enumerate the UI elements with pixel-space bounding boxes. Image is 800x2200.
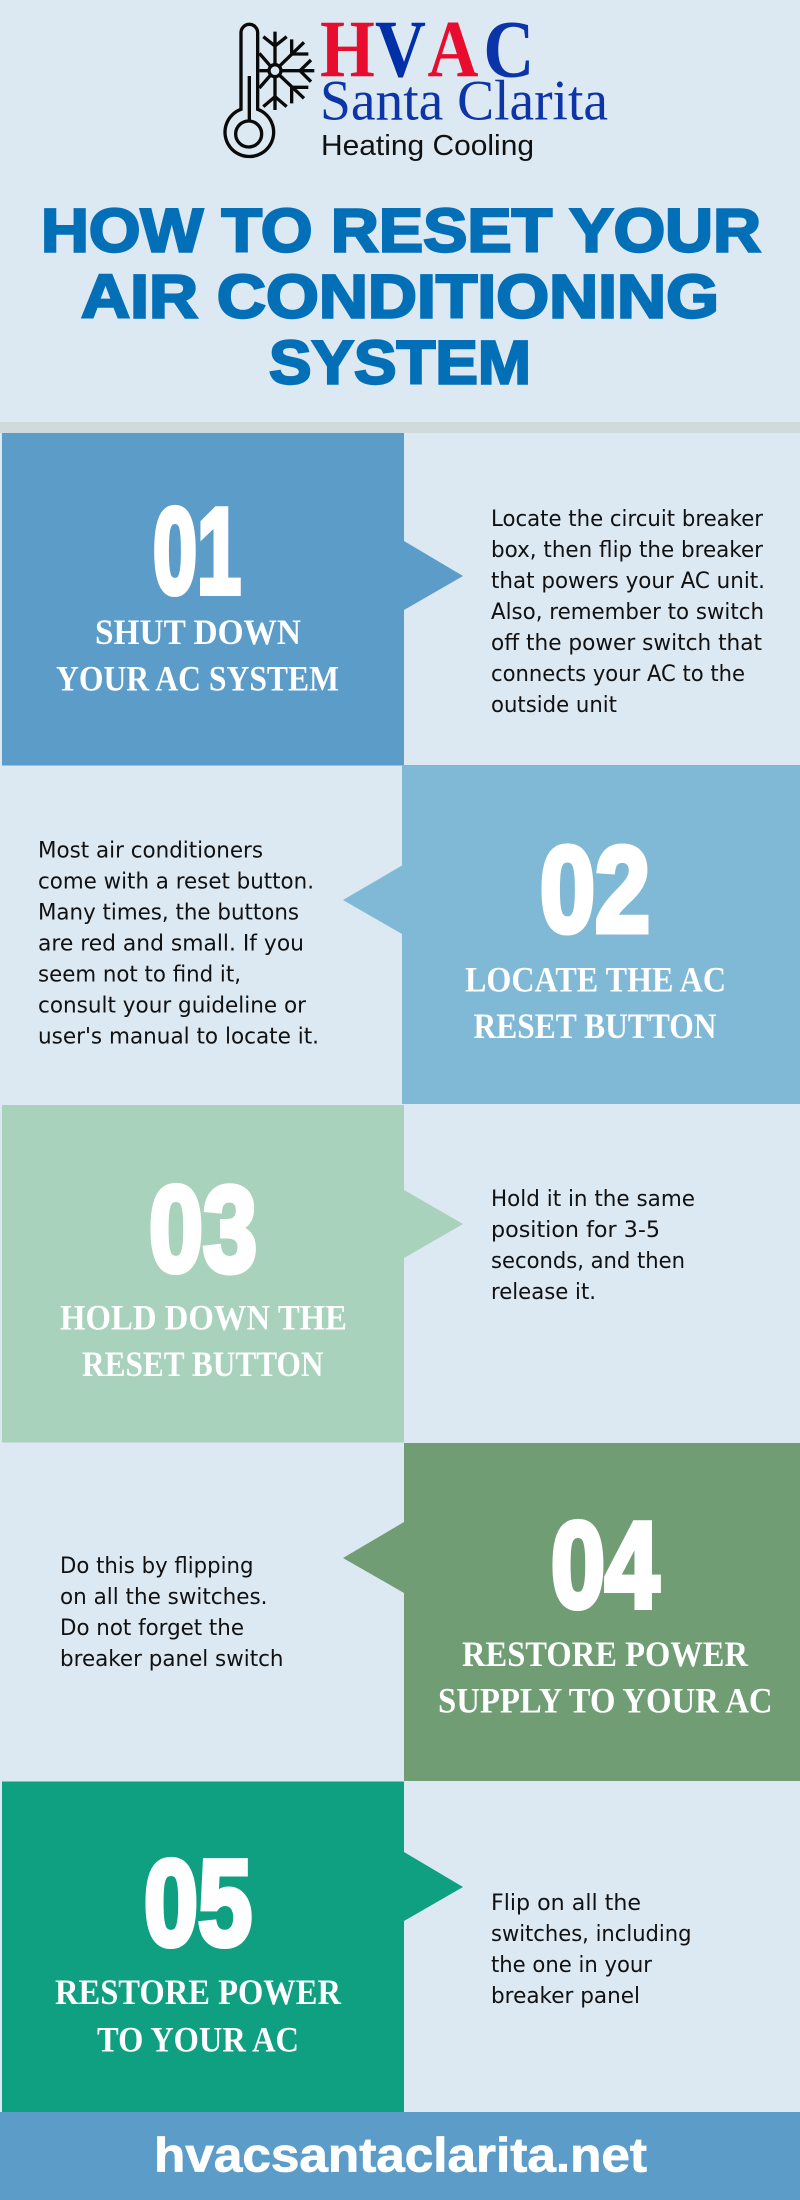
step description 01: Also, remember to switch <box>491 600 764 625</box>
footer website URL: hvacsantaclarita.net <box>154 2130 647 2182</box>
step heading 05 <box>55 1972 342 2060</box>
step heading 04 <box>438 1634 772 1720</box>
step heading 05: TO YOUR AC <box>97 2020 299 2060</box>
step description 02: consult your guideline or <box>38 994 307 1018</box>
step description 04: Do this by flipping <box>60 1554 254 1579</box>
step description 02: come with a reset button. <box>38 870 314 894</box>
step heading 02 <box>465 960 726 1046</box>
step description 03 <box>491 1187 695 1305</box>
step number 02: 02 <box>540 822 650 958</box>
step description 04 <box>60 1554 284 1672</box>
step description 04: on all the switches. <box>60 1585 268 1610</box>
step heading 03: HOLD DOWN THE <box>60 1298 347 1338</box>
step description 02: Many times, the buttons <box>38 900 299 926</box>
step heading 04: RESTORE POWER <box>462 1634 749 1674</box>
title: HOW TO RESET YOUR <box>41 196 761 264</box>
logo wordmark: HVAC: A <box>428 4 478 95</box>
logo wordmark: HVAC: H <box>320 4 375 95</box>
step description 01: outside unit <box>491 693 617 718</box>
step description 03: Hold it in the same <box>491 1187 695 1212</box>
step description 01: that powers your AC unit. <box>491 569 765 594</box>
step heading 01: YOUR AC SYSTEM <box>56 658 339 698</box>
step description 05 <box>491 1891 692 2009</box>
logo tagline: Heating Cooling <box>321 130 534 162</box>
step description 01 <box>491 507 765 718</box>
logo wordmark: HVAC: V <box>375 4 426 95</box>
step heading 01 <box>56 612 339 698</box>
step description 05: breaker panel <box>491 1984 640 2009</box>
step heading 02: RESET BUTTON <box>474 1006 716 1046</box>
icon: thermometer with snowflake <box>225 24 314 157</box>
step description 03: release it. <box>491 1280 596 1305</box>
panel: step 04 <box>60 1443 800 1781</box>
step heading 05: RESTORE POWER <box>55 1972 342 2012</box>
step description 02: are red and small. If you <box>38 932 304 956</box>
title <box>41 196 761 396</box>
step description 03: seconds, and then <box>491 1249 685 1274</box>
title: AIR CONDITIONING <box>81 262 719 330</box>
step description 04: Do not forget the <box>60 1616 244 1641</box>
panel: step 02 <box>38 765 800 1104</box>
step number 05: 05 <box>144 1835 252 1971</box>
step number 04: 04 <box>551 1497 659 1633</box>
step heading 02: LOCATE THE AC <box>465 960 726 1000</box>
logo wordmark: HVAC: C <box>483 4 534 95</box>
panel: step 03 <box>2 1105 695 1442</box>
step number 01: 01 <box>153 483 241 619</box>
step heading 03 <box>60 1298 347 1384</box>
logo <box>225 4 608 162</box>
step description 04: breaker panel switch <box>60 1647 284 1672</box>
step description 05: switches, including <box>491 1922 692 1947</box>
step description 01: off the power switch that <box>491 631 762 656</box>
step heading 03: RESET BUTTON <box>82 1344 324 1384</box>
logo wordmark: Santa Clarita: Santa Clarita <box>320 69 608 132</box>
step description 01: Locate the circuit breaker <box>491 507 764 532</box>
step description 01: connects your AC to the <box>491 662 745 687</box>
step description 02: seem not to find it, <box>38 962 241 988</box>
step number 03: 03 <box>149 1161 257 1297</box>
step description 03: position for 3-5 <box>491 1218 660 1243</box>
step heading 01: SHUT DOWN <box>95 612 301 652</box>
title: SYSTEM <box>269 328 531 396</box>
step description 02: Most air conditioners <box>38 838 263 864</box>
step heading 04: SUPPLY TO YOUR AC <box>438 1680 772 1720</box>
panel: step 05 <box>2 1782 692 2112</box>
step description 02 <box>38 838 319 1050</box>
step description 02: user's manual to locate it. <box>38 1024 319 1050</box>
step description 01: box, then flip the breaker <box>491 538 764 563</box>
step description 05: the one in your <box>491 1953 653 1978</box>
footer band <box>0 2112 800 2200</box>
step description 05: Flip on all the <box>491 1891 641 1916</box>
panel: step 01 <box>2 433 765 766</box>
